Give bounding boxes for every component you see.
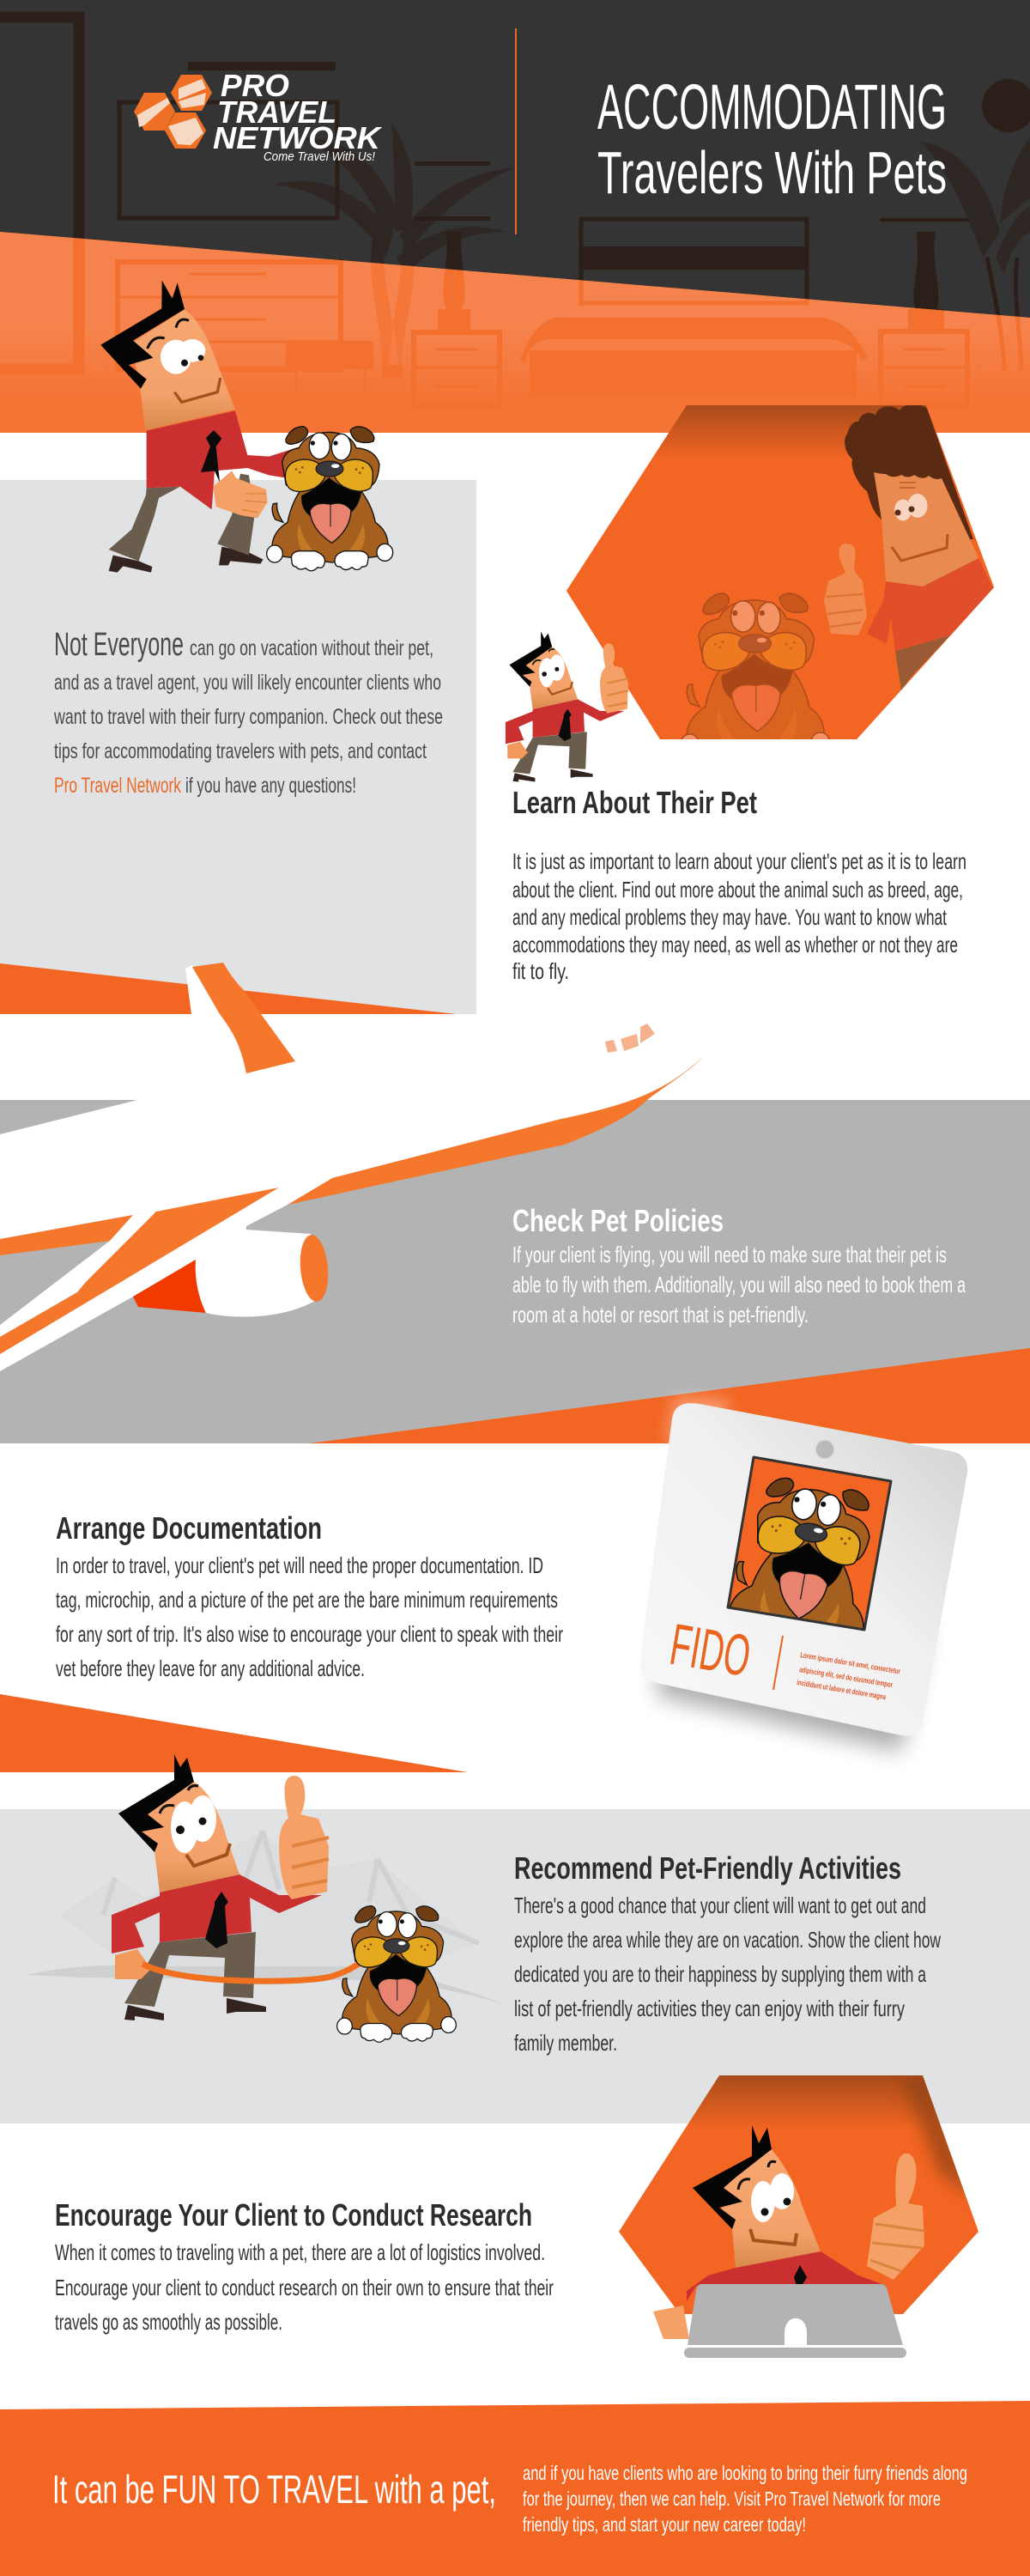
faded dog	[681, 592, 830, 739]
orange wedge	[0, 1694, 468, 1772]
tie knot	[794, 2265, 807, 2286]
face	[712, 2149, 821, 2268]
owner in hexagon	[824, 404, 994, 691]
body text: for any sort of trip. It's also wise to encourage your client to speak with their	[56, 1621, 563, 1647]
intro text: want to travel with their furry companion. Check out these	[53, 705, 443, 729]
header banner: dark room background	[0, 0, 1030, 433]
intro text: Pro Travel Network	[54, 774, 181, 798]
tag small text	[797, 1650, 901, 1701]
intro text	[53, 627, 443, 798]
body text: vet before they leave for any additional advice.	[56, 1656, 365, 1681]
logo wordmark: NETWORK	[213, 120, 383, 155]
shirt	[687, 2251, 887, 2301]
logo hexagon icons	[134, 75, 212, 149]
engine	[133, 1230, 330, 1317]
cockpit windows	[605, 1024, 655, 1053]
body text: family member.	[514, 2030, 617, 2056]
panel: research hexagon	[619, 2075, 978, 2314]
intro text: can go on vacation without their pet,	[190, 636, 433, 660]
footer band	[0, 2401, 1030, 2576]
panel: pet-friendly activities band	[0, 1809, 1030, 2123]
laptop	[684, 2284, 906, 2358]
logo: Pro Travel Network	[134, 68, 383, 164]
panel: intro grey block	[0, 480, 476, 1014]
intro text: and as a travel agent, you will likely encounter clients who	[54, 671, 441, 695]
illustration: leash	[142, 1964, 359, 1981]
body text: fit to fly.	[512, 958, 569, 984]
dog photo	[726, 1456, 893, 1631]
section: arrange documentation	[56, 1510, 563, 1681]
thumb up hand	[867, 2154, 924, 2280]
panel: learn about pet hexagon	[566, 404, 994, 764]
footer text: friendly tips, and start your new career today!	[523, 2513, 806, 2536]
intro text: if you have any questions!	[185, 774, 356, 798]
body text: When it comes to traveling with a pet, there are a lot of logistics involved.	[55, 2239, 545, 2265]
tag shadow	[657, 1460, 927, 1752]
heading: Check Pet Policies	[512, 1203, 724, 1238]
body text	[512, 1242, 966, 1327]
smile	[750, 2229, 797, 2245]
illustration: dog on leash	[337, 1906, 456, 2042]
illustration: small man with thumb up	[506, 631, 628, 781]
heading: Encourage Your Client to Conduct Research	[55, 2197, 532, 2233]
heading: Learn About Their Pet	[512, 785, 757, 820]
body text	[514, 1893, 941, 2056]
man	[100, 281, 300, 573]
tag glow	[665, 1395, 730, 1443]
footer text	[523, 2462, 967, 2536]
section: encourage research	[55, 2197, 554, 2335]
tag card	[640, 1403, 967, 1736]
section: recommend activities	[514, 1850, 941, 2056]
footer headline: It can be FUN TO TRAVEL with a pet,	[52, 2467, 496, 2512]
tag small text: incididunt ut labore et dolore magna	[797, 1678, 888, 1701]
section: learn about their pet	[512, 785, 966, 984]
hair	[693, 2125, 772, 2229]
body text: travels go as smoothly as possible.	[55, 2309, 282, 2335]
dog	[267, 427, 393, 571]
header divider line	[515, 28, 517, 234]
heading: Recommend Pet-Friendly Activities	[514, 1850, 901, 1886]
tag small text: adipiscing elit, sed do eiusmod tempor	[799, 1665, 894, 1689]
illustration: man with thumb up	[112, 1754, 329, 2020]
body text	[56, 1552, 563, 1681]
belly stripe right	[288, 1057, 703, 1205]
eyes	[738, 2161, 794, 2222]
orange corner triangle	[309, 1348, 1030, 1443]
wing	[0, 1178, 332, 1371]
intro orange swoosh	[0, 963, 457, 1014]
body text: tag, microchip, and a picture of the pet are the bare minimum requirements	[56, 1587, 558, 1613]
title	[597, 71, 947, 206]
illustration: pet ID tag	[640, 1395, 967, 1752]
illustration: airplane	[0, 963, 703, 1371]
logo tagline: Come Travel With Us!	[264, 149, 376, 164]
body text: room at a hotel or resort that is pet-friendly.	[512, 1302, 809, 1327]
body text	[55, 2239, 554, 2335]
body text: Encourage your client to conduct research on their own to ensure that their	[55, 2275, 554, 2300]
logo wordmark	[213, 68, 383, 155]
logo wordmark: PRO	[221, 68, 289, 103]
tag hole	[815, 1440, 834, 1459]
section: check pet policies	[512, 1203, 966, 1327]
left hand	[653, 2306, 689, 2339]
intro text: Not Everyone	[54, 627, 184, 663]
illustration: man at laptop	[653, 2125, 924, 2358]
intro text: tips for accommodating travelers with pets, and contact	[54, 739, 427, 763]
logo wordmark: TRAVEL	[217, 94, 336, 130]
tail fin	[185, 963, 295, 1073]
panel: grey flight band	[0, 1100, 1030, 1443]
fuselage	[0, 1022, 703, 1239]
belly stripe left	[0, 1215, 133, 1255]
tag small text: Lorem ipsum dolor sit amet, consectetur	[800, 1650, 901, 1676]
tag name: FIDO	[666, 1612, 755, 1689]
heading: Arrange Documentation	[56, 1510, 322, 1546]
illustration: man petting dog	[100, 281, 393, 573]
body text: In order to travel, your client's pet will need the proper documentation. ID	[56, 1552, 543, 1578]
illustration: mountains	[26, 1831, 506, 2005]
tag divider	[773, 1636, 783, 1690]
body text	[512, 848, 966, 984]
